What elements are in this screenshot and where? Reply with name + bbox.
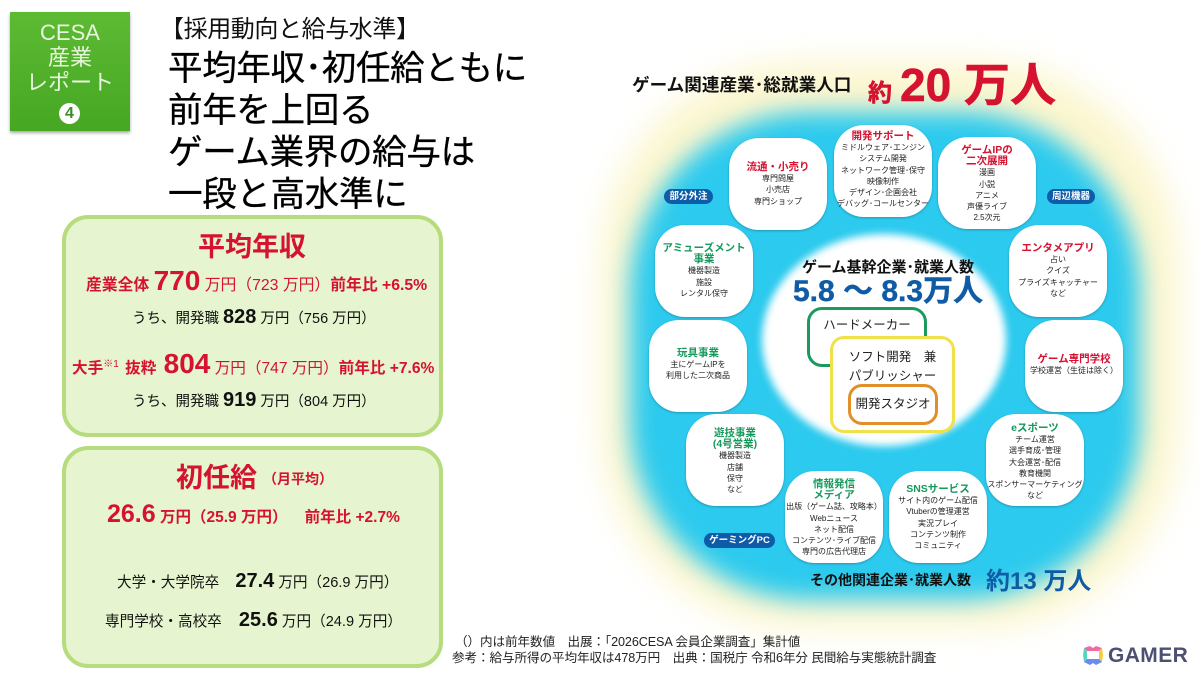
line: developers: うち、開発職 828 万円（756 万円） (132, 306, 376, 328)
card: entertainment apps: エンタメアプリ (1021, 242, 1095, 254)
card: information media: 出版（ゲーム誌、攻略本） (786, 502, 882, 511)
title block (160, 16, 527, 214)
card: development support (834, 125, 932, 217)
card: pachinko business: 保守 (727, 474, 743, 483)
heading: core companies: ゲーム基幹企業･就業人数 (802, 259, 974, 276)
card: SNS services: サイト内のゲーム配信 (898, 496, 978, 505)
heading: starting salary: 初任給 (176, 463, 257, 493)
box: development studio: 開発スタジオ (855, 397, 930, 411)
logo wordmark: GAMER (1108, 644, 1188, 667)
card: esports: など (1027, 491, 1043, 500)
card: SNS services: コミュニティ (914, 541, 962, 550)
card: esports: 教育機関 (1019, 469, 1051, 478)
report tag: レポート (26, 70, 114, 95)
card: information media: ネット配信 (814, 525, 854, 534)
card: development support: デバッグ･コールセンター (837, 199, 929, 208)
card: esports (986, 414, 1084, 506)
card: pachinko business: 店舗 (727, 463, 743, 472)
box: software publisher (830, 336, 955, 433)
heading note: monthly average: （月平均） (263, 471, 333, 487)
card: SNS services (889, 471, 987, 563)
card: development support: 映像制作 (867, 177, 899, 186)
card: development support: デザイン･企画会社 (849, 188, 917, 197)
heading: other companies: その他関連企業･就業人数 (810, 572, 971, 588)
pill: gaming PC: ゲーミングPC (709, 535, 770, 546)
card: game IP derivatives: 漫画 (979, 168, 995, 177)
card: pachinko business (686, 414, 784, 506)
card: entertainment apps: クイズ (1046, 266, 1070, 275)
card: game IP derivatives: 2.5次元 (973, 213, 1001, 222)
card: amusement business (655, 225, 753, 317)
card: game IP derivatives (938, 137, 1036, 229)
card: amusement business: アミューズメント (662, 242, 746, 254)
card: toy business: 玩具事業 (677, 347, 719, 359)
card: entertainment apps: など (1050, 289, 1066, 298)
panel: starting salary (62, 446, 443, 668)
report tag: 産業 (48, 45, 92, 70)
card: information media: 専門の広告代理店 (802, 547, 866, 556)
pill: outsourcing: 部分外注 (669, 191, 708, 202)
pill: gaming PC (704, 533, 775, 548)
card: toy business (649, 320, 747, 412)
card: pachinko business: 遊技事業 (714, 427, 756, 439)
footnotes: （）内は前年数値 出展：「2026CESA 会員企業調査」集計値 (455, 635, 800, 649)
heading (168, 50, 527, 214)
central white circle (762, 234, 1006, 446)
card: SNS services: Vtuberの管理運営 (906, 507, 970, 516)
total population value: 約20 万人 (868, 59, 1056, 111)
subheading: 【採用動向と給与水準】 (160, 16, 420, 43)
card: esports: チーム運営 (1015, 435, 1055, 444)
card: entertainment apps: プライズキャッチャー (1018, 278, 1098, 287)
heading: total population: ゲーム関連産業･総就業人口 (632, 75, 851, 95)
heading: 一段と高水準に (168, 176, 407, 214)
heading: average annual income: 平均年収 (198, 232, 306, 262)
line: major companies: 大手※1 抜粋 804 万円（747 万円）前年比 +7.6% (72, 348, 434, 379)
card: information media (785, 471, 883, 563)
card: amusement business: 機器製造 (688, 266, 720, 275)
card: entertainment apps: 占い (1050, 255, 1066, 264)
card: development support: ミドルウェア･エンジン (841, 143, 925, 152)
icon: number 4: 4 (65, 105, 74, 122)
card: esports: 選手育成･管理 (1009, 446, 1061, 455)
card: esports: 大会運営･配信 (1009, 458, 1061, 467)
box: software publisher: ソフト開発 兼 (849, 350, 936, 364)
icon: number 4 (59, 103, 80, 124)
line: vocational and high school graduates: 専門学校・高校卒 25.6 万円（24.9 万円） (105, 609, 402, 631)
card: distribution and retail: 流通・小売り (746, 161, 810, 173)
box: hardware maker: ハードメーカー (823, 318, 911, 332)
card: game IP derivatives: 二次展開 (966, 155, 1008, 167)
line: industry total: 産業全体 770 万円（723 万円）前年比 +6.5% (86, 265, 427, 296)
card: information media: Webニュース (810, 514, 858, 523)
footnotes (452, 635, 936, 665)
logo: GAMER (1083, 644, 1188, 667)
card: game vocational schools (1025, 320, 1123, 412)
card: amusement business: 施設 (696, 278, 712, 287)
card: pachinko business: 機器製造 (719, 451, 751, 460)
card: distribution and retail: 専門ショップ (754, 197, 802, 206)
background glow: yellow outer (602, 62, 1178, 628)
report tag: CESA (40, 20, 100, 45)
card: information media: メディア (813, 489, 855, 501)
card: information media: コンテンツ･ライブ配信 (792, 536, 876, 545)
panel: average annual income (62, 215, 443, 437)
footnotes: 参考：給与所得の平均年収は478万円 出典：国税庁 令和6年分 民間給与実態統計調査 (452, 651, 936, 665)
card: distribution and retail: 専門問屋 (762, 174, 794, 183)
card: development support: ネットワーク管理･保守 (841, 166, 925, 175)
box: development studio (848, 384, 938, 425)
card: game IP derivatives: ゲームIPの (961, 144, 1013, 156)
other companies value: 約13 万人 (986, 568, 1091, 595)
card: game IP derivatives: アニメ (975, 191, 999, 200)
card: pachinko business: など (727, 485, 743, 494)
report tag (10, 12, 130, 131)
card: distribution and retail: 小売店 (766, 185, 790, 194)
heading: ゲーム業界の給与は (168, 134, 475, 172)
card: toy business: 利用した二次商品 (666, 371, 730, 380)
card: development support: システム開発 (859, 154, 907, 163)
card: entertainment apps (1009, 225, 1107, 317)
line: starting salary value: 26.6 万円（25.9 万円） 前年比 +2.7% (107, 500, 400, 528)
card: toy business: 主にゲームIPを (670, 360, 726, 369)
icon: GAMER mark (1083, 646, 1103, 665)
card: pachinko business: (4号営業) (713, 438, 757, 450)
card: amusement business: 事業 (694, 253, 714, 265)
background glow: blue field (630, 112, 1140, 600)
line: university graduates: 大学・大学院卒 27.4 万円（26.9 万円） (117, 570, 398, 592)
pill: peripherals (1047, 189, 1095, 204)
card: SNS services: コンテンツ制作 (910, 530, 966, 539)
box: software publisher: パブリッシャー (849, 369, 936, 383)
card: information media: 情報発信 (813, 478, 855, 490)
card: development support: 開発サポート (852, 130, 914, 142)
card: game IP derivatives: 小説 (979, 180, 995, 189)
pill: peripherals: 周辺機器 (1052, 191, 1090, 202)
card: game IP derivatives: 声優ライブ (967, 202, 1007, 211)
card: esports: スポンサーマーケティング (987, 480, 1083, 489)
card: amusement business: レンタル保守 (680, 289, 728, 298)
line: major developers: うち、開発職 919 万円（804 万円） (132, 389, 376, 411)
heading: 前年を上回る (168, 92, 373, 130)
card: esports: eスポーツ (1011, 422, 1059, 434)
card: game vocational schools: 学校運営（生徒は除く） (1030, 366, 1118, 375)
heading: 平均年収･初任給ともに (168, 50, 527, 88)
box: hardware maker (807, 307, 927, 367)
card: game vocational schools: ゲーム専門学校 (1037, 353, 1111, 365)
card: SNS services: SNSサービス (906, 483, 970, 495)
core companies value: 5.8 ～ 8.3万人 (793, 275, 983, 308)
card: SNS services: 実況プレイ (918, 519, 958, 528)
card: distribution and retail (729, 138, 827, 230)
pill: outsourcing (664, 189, 713, 204)
